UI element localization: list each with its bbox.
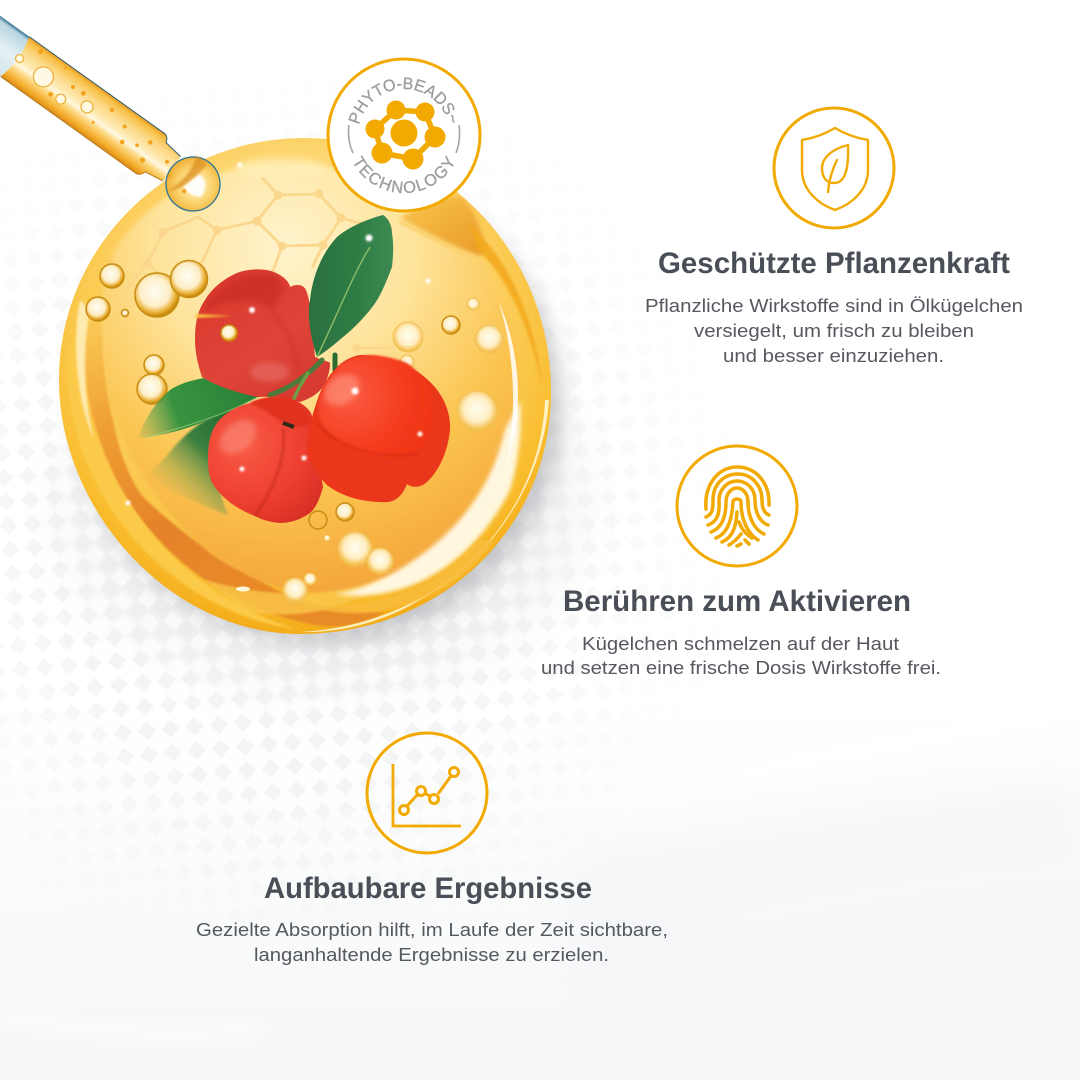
fruit: front left	[208, 397, 323, 523]
bubble on fruit	[221, 325, 237, 341]
oil in tube	[1, 37, 186, 189]
text block: Pflanzliche Wirkstoffe sind in Ölkügelchen	[645, 295, 1023, 316]
badge: phyto-beads technology	[326, 58, 482, 212]
outer glossy rim	[68, 255, 300, 630]
text block	[645, 295, 1023, 366]
icon: shield with leaf	[774, 108, 894, 228]
drop body	[59, 138, 551, 634]
text block	[196, 919, 668, 965]
amber swirl bottom	[206, 580, 374, 616]
glass tube	[0, 0, 32, 78]
orange rim crescent	[78, 290, 385, 626]
lower right white highlight	[335, 400, 521, 596]
inner lens	[100, 164, 519, 595]
molecule icon	[366, 100, 446, 170]
heading: Berühren zum Aktivieren	[563, 585, 911, 618]
icon: fingerprint	[677, 446, 797, 566]
left leaf	[138, 377, 258, 438]
text block: und besser einzuziehen.	[723, 345, 944, 366]
feature 3: buildable results	[196, 733, 668, 965]
heading: Geschützte Pflanzenkraft	[658, 247, 1010, 280]
text block	[541, 633, 941, 678]
stems	[270, 355, 335, 423]
tip bulb	[155, 146, 231, 222]
honeycomb lines	[125, 178, 393, 348]
text block: langanhaltende Ergebnisse zu erzielen.	[254, 944, 609, 965]
fruit: right	[307, 355, 450, 502]
background	[0, 376, 1080, 1080]
top leaf	[309, 215, 393, 357]
feature 1: protected plant power	[645, 108, 1023, 366]
drop shadow	[78, 167, 562, 643]
top highlight	[234, 156, 325, 172]
badge arc text: bottom: TECHNOLOGY	[354, 155, 454, 194]
tube bubbles	[8, 49, 97, 122]
text block: versiegelt, um frisch zu bleiben	[694, 320, 974, 341]
golden glint	[195, 314, 232, 318]
text block: Kügelchen schmelzen auf der Haut	[582, 633, 899, 654]
oil drop with fruit	[59, 138, 551, 634]
fruit: back	[195, 269, 330, 402]
upper right rim	[400, 197, 483, 256]
text block: und setzen eine frische Dosis Wirkstoffe frei.	[541, 657, 941, 678]
icon: line chart	[367, 733, 487, 853]
dropper	[0, 0, 231, 222]
bubbles	[86, 260, 503, 602]
heading: Aufbaubare Ergebnisse	[264, 872, 592, 905]
badge arc text: top: PHYTO-BEADS~	[348, 77, 456, 124]
sparkles	[126, 162, 430, 506]
lower left leaf	[148, 405, 242, 515]
text block: Gezielte Absorption hilft, im Laufe der Zeit sichtbare,	[196, 919, 668, 940]
feature 2: touch to activate	[541, 446, 941, 678]
